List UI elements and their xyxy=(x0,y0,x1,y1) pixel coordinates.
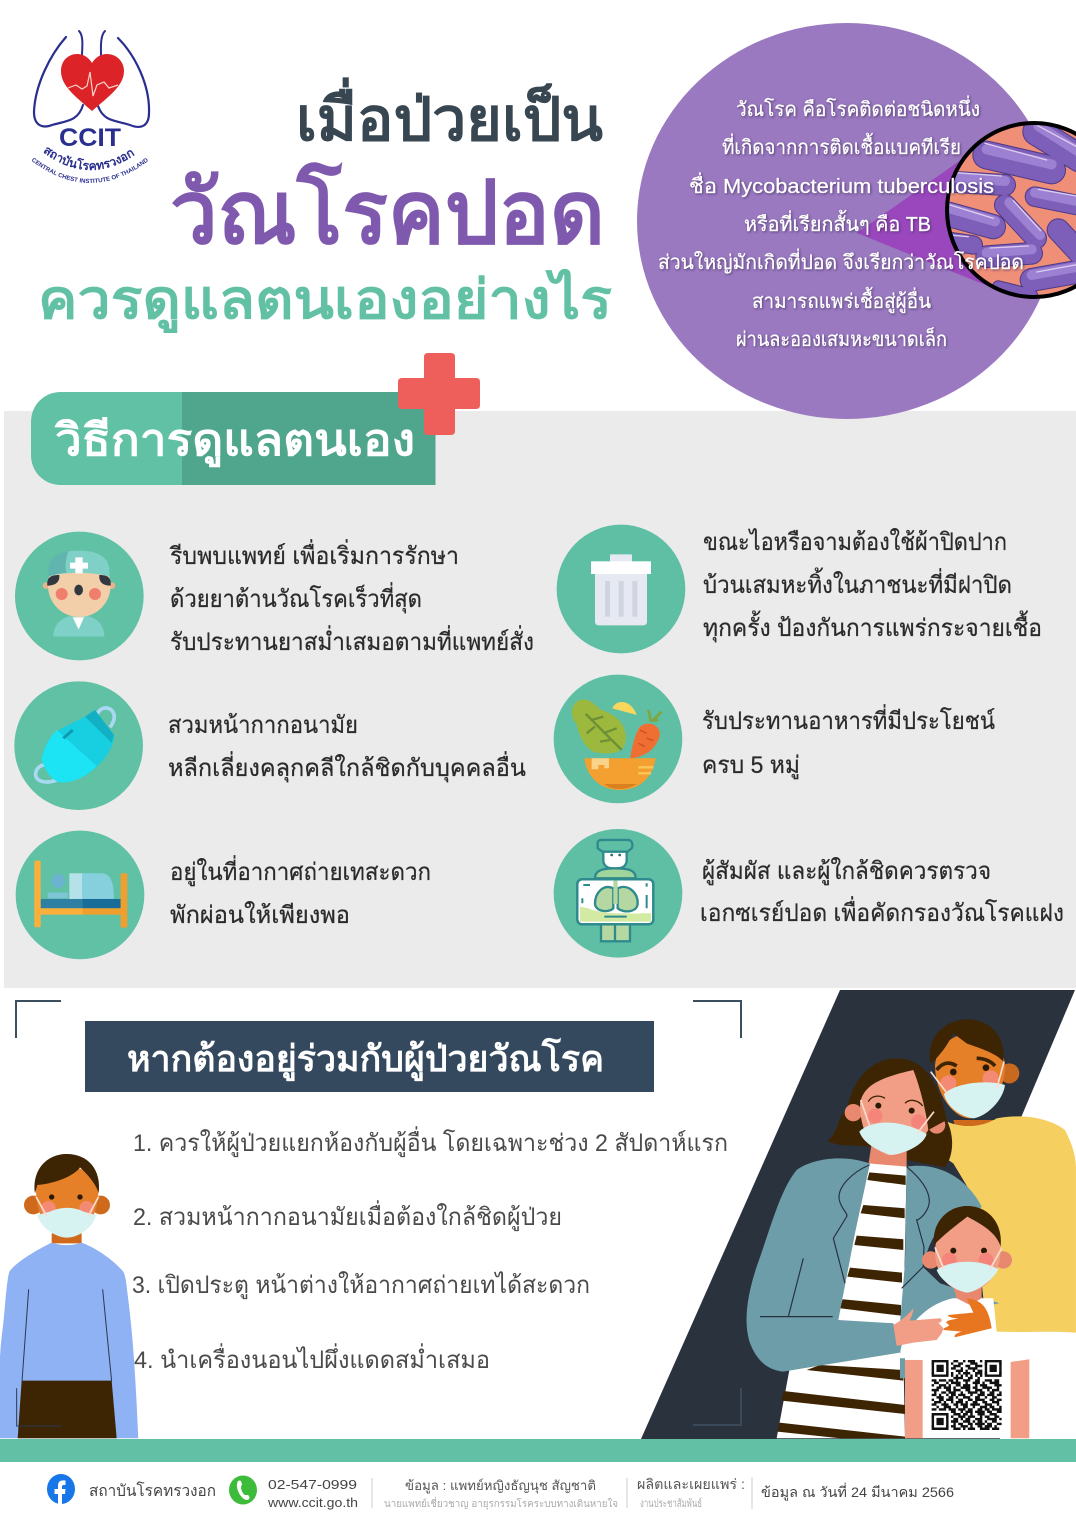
magnified bacteria lens xyxy=(945,123,1076,297)
corner brackets xyxy=(16,1001,741,1038)
panel background xyxy=(4,411,1076,988)
icon: medical cross xyxy=(398,353,480,435)
icon: facebook xyxy=(47,1474,75,1504)
illustration: family with masks xyxy=(747,1019,1076,1438)
mother xyxy=(747,1058,999,1438)
illustration: masked patient xyxy=(0,1154,138,1438)
logo heart xyxy=(61,54,124,111)
text: ventilation: พักผ่อนให้เพียงพอ xyxy=(170,901,350,929)
father xyxy=(930,1019,1076,1333)
logo English name: CENTRAL CHEST INSTITUTE OF THAILAND xyxy=(32,158,148,183)
panel: self-care xyxy=(4,353,1076,988)
list: household precautions: 2. สวมหน้ากากอนามัยเมื่อต้องใกล้ชิดผู้ป่วย xyxy=(133,1200,562,1232)
publisher credit xyxy=(637,1476,745,1510)
icon: trash bin xyxy=(557,525,685,653)
list: household precautions: 1. ควรให้ผู้ป่วยแยกห้องกับผู้อื่น โดยเฉพาะช่วง 2 สัปดาห์แรก xyxy=(133,1126,728,1158)
list: household precautions xyxy=(132,1126,728,1374)
publisher credit: ผลิตและเผยแพร่ : xyxy=(637,1476,745,1492)
circle text xyxy=(658,95,1024,351)
title line 3: ควรดูแลตนเองอย่างไร xyxy=(38,268,612,333)
icon: face mask xyxy=(14,681,143,810)
facebook page name: สถาบันโรคทรวงอก xyxy=(89,1481,216,1500)
icon: x-ray xyxy=(554,829,682,958)
heading: living with a patient xyxy=(85,1021,654,1092)
text: see doctor: ด้วยยาต้านวัณโรคเร็วที่สุด xyxy=(170,582,422,614)
publisher credit: งานประชาสัมพันธ์ xyxy=(640,1497,702,1510)
dark diagonal backdrop xyxy=(641,990,1075,1439)
footer xyxy=(47,1474,954,1510)
circle text: ชื่อ Mycobacterium tuberculosis xyxy=(689,172,994,198)
data source credit xyxy=(384,1478,618,1510)
text: wear mask xyxy=(168,712,526,783)
QR code xyxy=(932,1361,1002,1429)
text: cover mouth: ขณะไอหรือจามต้องใช้ผ้าปิดปาก xyxy=(703,528,1007,556)
phone number and website xyxy=(267,1477,358,1510)
child xyxy=(900,1206,1076,1438)
text: see doctor xyxy=(169,539,534,656)
logo lungs xyxy=(34,31,149,127)
section heading: วิธีการดูแลตนเอง xyxy=(54,416,415,467)
circle text: ที่เกิดจากการติดเชื้อแบคทีเรีย xyxy=(722,133,961,159)
circle text: วัณโรค คือโรคติดต่อชนิดหนึ่ง xyxy=(736,95,980,121)
data source credit: ข้อมูล : แพทย์หญิงธัญนุช สัญชาติ xyxy=(405,1478,596,1494)
hands xyxy=(893,1308,943,1346)
text: ventilation: อยู่ในที่อากาศถ่ายเทสะดวก xyxy=(170,855,431,887)
date: ข้อมูล ณ วันที่ 24 มีนาคม 2566 xyxy=(761,1483,954,1501)
section heading xyxy=(31,392,436,485)
logo Thai name: สถาบันโรคทรวงอก xyxy=(44,148,135,170)
magnifier beam xyxy=(857,150,1005,293)
text: nutrition: รับประทานอาหารที่มีประโยชน์ xyxy=(702,704,995,735)
title line 2: วัณโรคปอด xyxy=(170,162,605,262)
text: wear mask: หลีกเลี่ยงคลุกคลีใกล้ชิดกับบุคคลอื่น xyxy=(168,751,526,783)
circle text: ผ่านละอองเสมหะขนาดเล็ก xyxy=(736,326,947,351)
icon: healthy food xyxy=(554,675,682,803)
text: contact screening xyxy=(700,857,1064,927)
text: cover mouth: บ้วนเสมหะทิ้งในภาชนะที่มีฝาปิด xyxy=(703,567,1012,599)
text: see doctor: รับประทานยาสม่ำเสมอตามที่แพทย์สั่ง xyxy=(170,625,534,656)
icon: phone xyxy=(229,1476,257,1504)
striped shirt xyxy=(837,1163,907,1327)
teal band xyxy=(0,1439,1076,1462)
circle text: หรือที่เรียกสั้นๆ คือ TB xyxy=(744,210,931,236)
faint bottom-right bracket xyxy=(693,1388,741,1425)
title line 1: เมื่อป่วยเป็น xyxy=(296,77,603,153)
text: wear mask: สวมหน้ากากอนามัย xyxy=(168,712,358,739)
panel: TB definition circle xyxy=(637,23,1076,419)
text: cover mouth xyxy=(703,528,1042,643)
circle text: ส่วนใหญ่มักเกิดที่ปอด จึงเรียกว่าวัณโรคปอด xyxy=(658,248,1024,274)
text: nutrition xyxy=(702,704,995,780)
text: nutrition: ครบ 5 หมู่ xyxy=(702,752,800,780)
data source credit: นายแพทย์เชี่ยวชาญ อายุรกรรมโรคระบบทางเดินหายใจ xyxy=(384,1496,618,1510)
text: contact screening: เอกซเรย์ปอด เพื่อคัดกรองวัณโรคแฝง xyxy=(700,896,1064,927)
phone number and website: 02-547-0999 xyxy=(268,1477,357,1492)
icon: doctor xyxy=(15,532,144,660)
circle text: สามารถแพร่เชื้อสู่ผู้อื่น xyxy=(752,287,931,314)
coat xyxy=(747,1158,905,1378)
purple circle xyxy=(637,23,1057,419)
icon: bed xyxy=(16,831,144,959)
logo CCIT lettering: CCIT xyxy=(59,124,121,152)
logo: CCIT xyxy=(32,30,150,183)
heading: living with a patient: หากต้องอยู่ร่วมกับผู้ป่วยวัณโรค xyxy=(127,1037,604,1082)
text: see doctor: รีบพบแพทย์ เพื่อเริ่มการรักษา xyxy=(169,539,459,570)
list: household precautions: 4. นำเครื่องนอนไปผึ่งแดดสม่ำเสมอ xyxy=(134,1343,490,1374)
list: household precautions: 3. เปิดประตู หน้าต่างให้อากาศถ่ายเทได้สะดวก xyxy=(132,1271,590,1300)
text: cover mouth: ทุกครั้ง ป้องกันการแพร่กระจายเชื้อ xyxy=(703,610,1042,643)
phone number and website: www.ccit.go.th xyxy=(267,1495,358,1510)
text: contact screening: ผู้สัมผัส และผู้ใกล้ชิดควรตรวจ xyxy=(702,857,991,886)
text: ventilation xyxy=(170,855,431,929)
